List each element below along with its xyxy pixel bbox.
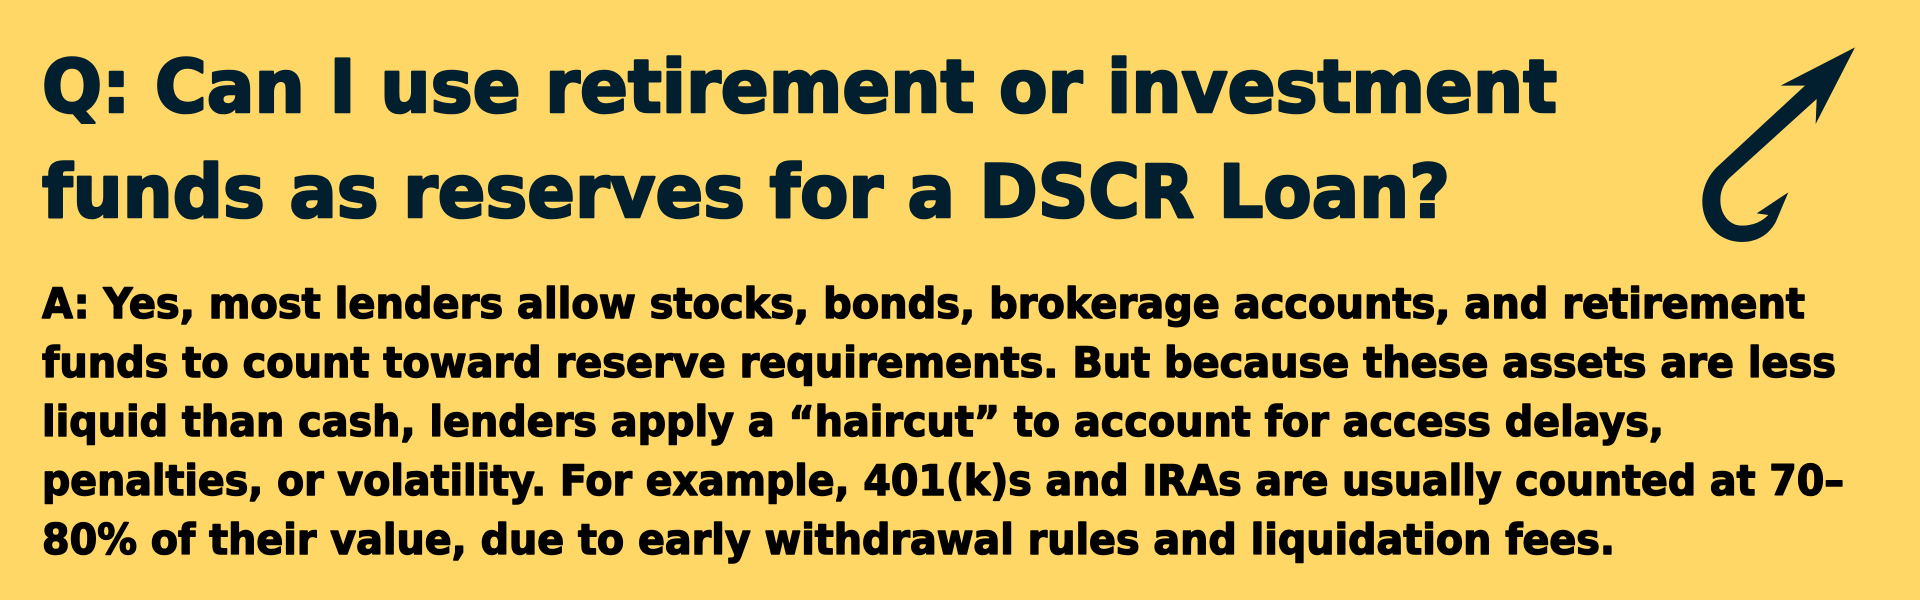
icon: hook arrow: [1702, 47, 1855, 242]
answer text block: 80% of their value, due to early withdrawal rules and liquidation fees.: [42, 515, 1615, 564]
heading: question: funds as reserves for a DSCR Loan?: [42, 150, 1450, 235]
heading: question: [42, 45, 1557, 235]
answer text block: funds to count toward reserve requirements. But because these assets are less: [42, 338, 1836, 387]
answer text block: A: Yes, most lenders allow stocks, bonds, brokerage accounts, and retirement: [42, 279, 1805, 328]
answer text block: penalties, or volatility. For example, 401(k)s and IRAs are usually counted at 70–: [42, 456, 1844, 505]
answer text block: [42, 279, 1844, 564]
heading: question: Q: Can I use retirement or investment: [42, 45, 1557, 130]
answer text block: liquid than cash, lenders apply a “haircut” to account for access delays,: [42, 397, 1664, 446]
